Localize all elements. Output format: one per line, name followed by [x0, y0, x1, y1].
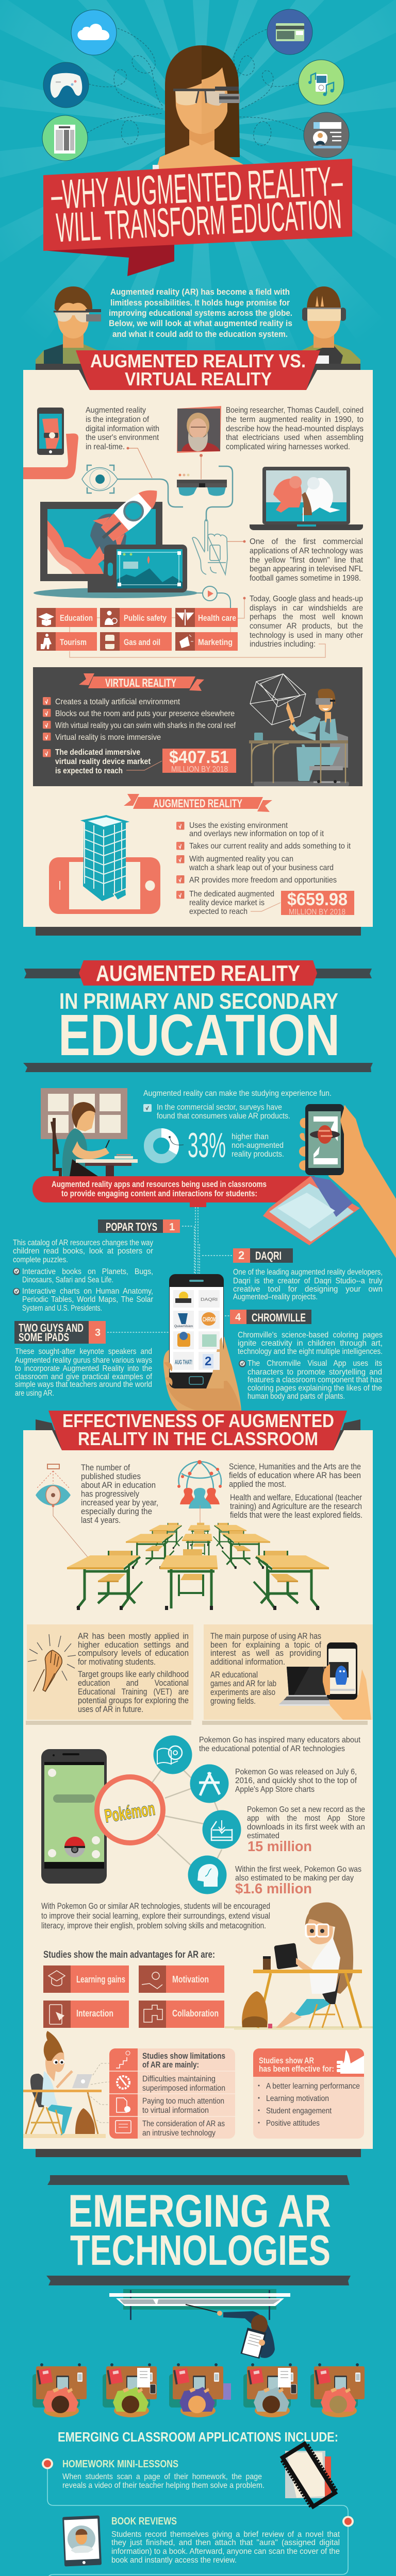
illustration: students at desks	[32, 2363, 365, 2417]
stat: 15 million downloads: app with the most App Store	[247, 1814, 365, 1823]
text: Two Guys: simple ways that teachers around the world	[15, 1380, 152, 1389]
text: AR definition: in real-time.	[86, 443, 125, 451]
text: fields of education: Health and welfare, Educational (teacher	[230, 1493, 362, 1502]
text: Chromville: ignite creativity in children through art,	[238, 1339, 383, 1348]
text: main purpose: interest as well as providing	[210, 1648, 321, 1658]
heading banner: effectiveness: REALITY IN THE CLASSROOM	[78, 1428, 318, 1449]
text: studying experience: found that consumers value AR products.	[157, 1112, 290, 1121]
text: Daqri: Augmented–reality projects.	[233, 1293, 318, 1301]
ribbon: augmented reality	[124, 794, 272, 812]
text: Google glass: displays in car windshields are	[250, 604, 363, 613]
callout: apps and resources: to provide engaging content and interactions for students:	[61, 1189, 257, 1198]
text: Daqri: Daqri is the creator of Daqri Studio--a truly	[233, 1277, 383, 1285]
text: higher education	[78, 1631, 189, 1714]
label: Daqri	[233, 1248, 293, 1263]
checklist: augmented reality: Takes our current reality and adds something to it	[189, 842, 351, 851]
table: effectiveness of AR: A better learning performance	[266, 2082, 360, 2091]
section heading: AR in primary and secondary education: IN PRIMARY AND SECONDARY	[59, 989, 338, 1014]
advantage tiles: Motivation	[172, 1974, 209, 1985]
table: effectiveness of AR: Student engagement	[266, 2107, 332, 2115]
stat: 15 million downloads: 15 million	[248, 1838, 312, 1854]
text: social learning: literacy, improve their english, problem solving skills and metacognition.	[41, 1921, 266, 1930]
label: Two Guys and Some iPads: SOME IPADS	[19, 1331, 69, 1344]
stat: AR market: MILLION BY 2018	[289, 908, 345, 917]
checklist: augmented reality: and overlays new information on top of it	[189, 829, 324, 838]
woman with smart glasses	[153, 45, 249, 180]
card: higher education	[26, 1624, 193, 1725]
application: homework mini-lessons: When students scan a page of their homework, the page	[62, 2472, 262, 2481]
text: main purpose: growing fields.	[210, 1696, 256, 1706]
stat: 33 percent donut	[148, 1126, 284, 1165]
text: number of studies: about AR in education	[81, 1480, 156, 1490]
stat: 1.6 million per day	[235, 1865, 361, 1896]
heading: emerging classroom applications: EMERGING CLASSROOM APPLICATIONS INCLUDE:	[58, 2429, 338, 2445]
text: Pokemon release: Apple's App Store charts	[235, 1785, 315, 1794]
text: Two Guys: to incorporate Augmented Reality into the	[15, 1364, 152, 1373]
section heading: emerging AR technologies	[46, 2175, 351, 2285]
text: number of studies: especially during the	[81, 1506, 152, 1516]
application: book reviews: they just finished, and then attach that "aura" (assigned digital	[111, 2538, 340, 2547]
play button connector	[191, 586, 230, 609]
text: Pokemon educators: the educational potential of AR technologies	[199, 1744, 345, 1753]
text: AR definition	[86, 406, 159, 451]
industry tiles: Gas and oil	[124, 637, 160, 647]
application: book reviews: BOOK REVIEWS	[111, 2516, 177, 2527]
connector lines	[118, 447, 233, 521]
callout: apps and resources	[32, 1176, 315, 1207]
text: Pokemon release: Pokemon Go was released on July 6,	[235, 1768, 357, 1776]
illustration: laptop, phone and hand	[279, 1642, 371, 1720]
app icons: DAQRI	[201, 1297, 218, 1302]
text: Popar Toys: Periodic Tables, World Maps, The Solar	[22, 1295, 153, 1304]
table: limitations of AR: superimposed information	[142, 2084, 225, 2093]
table: effectiveness of AR: has been effective for:	[259, 2064, 334, 2074]
woman with VR goggles	[296, 286, 360, 370]
text: social learning: With Pokemon Go or similar AR technologies, students will be encouraged	[41, 1901, 270, 1911]
label: Daqri: DAQRI	[255, 1249, 282, 1262]
text: main purpose: additional information.	[210, 1657, 285, 1667]
app icons: 2	[205, 1354, 211, 1368]
text: fields of education: applied the most.	[229, 1479, 286, 1489]
text: Boeing researcher: the term augmented reality in 1990, to	[226, 415, 364, 424]
industry tiles	[37, 608, 238, 651]
intro paragraph: Below, we will look at what augmented reality is	[109, 318, 292, 328]
stat: AR market	[251, 890, 354, 917]
dotted connector lines	[107, 1207, 233, 1332]
heading banner: AR vs VR: VIRTUAL REALITY	[125, 368, 272, 389]
checklist: virtual reality	[43, 697, 236, 775]
label: Daqri: 2	[238, 1249, 244, 1262]
text: Popar Toys: System and U.S. Presidents.	[22, 1304, 102, 1313]
stat: 15 million downloads: Pokemon Go set a new record as the	[247, 1805, 365, 1814]
illustration: monitor with rocket and tablet	[34, 476, 197, 598]
photo: Thomas Caudell	[177, 406, 221, 453]
application: book reviews: information) to a book. Afterward, anyone can scan the cover of the	[111, 2547, 340, 2556]
label: Popar Toys: 1	[169, 1222, 175, 1233]
text: first down line: began appearing in televised NFL	[250, 565, 363, 573]
text: higher education: Educational Training (VET) are	[78, 1687, 189, 1697]
label: Chromville: 4	[235, 1312, 241, 1323]
text: Google glass: perhaps the most well known	[250, 613, 363, 621]
table: limitations of AR: The consideration of AR as	[142, 2120, 225, 2128]
text: social learning: to improve their social learning, explore their surroundings, extend visual	[41, 1911, 270, 1921]
table: limitations of AR: of AR are mainly:	[142, 2060, 199, 2070]
Pokemon hub with connectors: Pokémon	[103, 1798, 156, 1826]
text: AR definition: digital information with	[86, 425, 159, 433]
text: Two Guys	[15, 1347, 153, 1398]
checklist: virtual reality: Virtual reality is more immersive	[55, 733, 161, 742]
table: limitations of AR	[109, 2048, 235, 2139]
table: limitations of AR: Paying too much attention	[142, 2097, 224, 2106]
icon: app store	[190, 1764, 229, 1803]
text: fields of education: fields of education where AR has been	[229, 1470, 361, 1480]
table: limitations of AR: Studies show limitations	[142, 2051, 225, 2061]
intro paragraph: improving educational systems across the globe.	[109, 308, 292, 318]
icon: tablet with avatar	[62, 2515, 102, 2566]
section heading: AR in primary and secondary education: AUGMENTED REALITY	[96, 961, 300, 986]
icon: download tray	[202, 1810, 241, 1849]
text: higher education: education and Vocational	[78, 1678, 189, 1688]
heading banner: effectiveness: EFFECTIVENESS OF AUGMENTED	[62, 1410, 334, 1431]
illustration: building popping out of phone	[49, 816, 160, 914]
man with smart glasses	[36, 286, 101, 370]
timeline path	[23, 2464, 349, 2576]
advantage tiles: Learning gains	[76, 1974, 125, 1985]
text: Google glass: Today, Google glass and heads-up	[250, 595, 363, 603]
advantage tiles: Interaction	[76, 2008, 113, 2019]
application: homework mini-lessons	[42, 2443, 337, 2507]
connector with dot	[227, 540, 245, 543]
table: limitations of AR: to virtual information	[142, 2106, 209, 2115]
section heading: AR in primary and secondary education	[23, 960, 373, 1072]
application: book reviews	[62, 2515, 354, 2566]
illustration: teacher at whiteboard	[109, 2289, 290, 2359]
text: Boeing researcher: describe how the head-mounted displays	[226, 425, 364, 433]
text: higher education: for motivating students.	[78, 1657, 156, 1667]
card: main purpose of AR	[202, 1624, 373, 1725]
advantage tiles	[43, 1965, 224, 2028]
stat: AR market: $659.98	[287, 890, 348, 909]
table: limitations of AR: Difficulties maintaining	[142, 2075, 216, 2083]
application: book reviews: book and instantly access the review.	[111, 2556, 237, 2565]
icon: game controller	[43, 62, 89, 108]
text: Two Guys: classroom and give practical examples of	[15, 1372, 153, 1381]
text: Boeing researcher: complicated wiring harnesses worked.	[226, 443, 350, 451]
illustration: hand holding phone with AR apps	[163, 1274, 241, 1411]
text: main purpose: been for explaining a topic of	[210, 1640, 321, 1650]
stat: VR market: $407.51	[169, 748, 229, 767]
section heading: AR in primary and secondary education: EDUCATION	[58, 1003, 340, 1067]
text: number of studies: last 4 years.	[81, 1515, 121, 1525]
app icons: CHROM	[203, 1316, 216, 1323]
application: homework mini-lessons: HOMEWORK MINI-LESSONS	[62, 2459, 178, 2470]
text: Two Guys: are using AR.	[15, 1389, 54, 1398]
icon: eye scan	[82, 465, 118, 493]
text: Chromville: coloring pages explaining the likes of the	[248, 1384, 382, 1393]
illustration: worried boy at laptop	[23, 2031, 109, 2138]
heading banner: AR vs VR: AUGMENTED REALITY VS.	[90, 350, 306, 371]
illustration: student at window	[41, 1088, 138, 1176]
checklist: augmented reality: reality device market is	[189, 899, 265, 907]
text: Pokemon educators: Pokemon Go has inspired many educators about	[199, 1736, 360, 1744]
table: effectiveness of AR: Learning motivation	[266, 2094, 329, 2103]
text: Boeing researcher: Boeing researcher, Thomas Caudell, coined	[226, 406, 364, 415]
icon: phone with hand	[23, 408, 78, 479]
text: higher education: AR has been mostly applied in	[78, 1631, 189, 1641]
text: Chromville: The Chromville Visual App uses its	[248, 1359, 382, 1368]
icon: cloud	[71, 10, 117, 55]
icon: globe and people	[177, 1460, 222, 1525]
table: effectiveness of AR: Positive attitudes	[266, 2119, 320, 2128]
text: Google glass: industries including:	[250, 640, 316, 649]
label: Two Guys and Some iPads: TWO GUYS AND	[19, 1321, 84, 1334]
text: studying experience: In the commercial sector, surveys have	[157, 1103, 282, 1112]
text: Boeing researcher: that electricians used when assembling	[226, 433, 364, 442]
stat: 33 percent donut: reality products.	[232, 1150, 284, 1159]
icon: film on book	[281, 2443, 337, 2507]
text: Popar Toys	[13, 1239, 153, 1313]
text: Daqri	[233, 1268, 383, 1301]
stat: 1.6 million per day: Within the first week, Pokemon Go was	[235, 1865, 361, 1874]
app icons: AUG THAT!	[175, 1359, 192, 1366]
panel: effectiveness of AR in the classroom	[23, 1410, 373, 2157]
text: AR definition: the user's environment	[86, 433, 159, 442]
checklist: augmented reality: With augmented reality you can	[189, 855, 293, 863]
text: main purpose: experiments are also	[210, 1687, 275, 1697]
industry tiles: Marketing	[198, 637, 233, 647]
industry tiles: Health care	[198, 613, 236, 623]
intro paragraph: and what it could add to the education system.	[112, 329, 288, 339]
text: studying experience	[143, 1089, 332, 1121]
table: effectiveness of AR	[253, 2048, 364, 2139]
text: number of studies	[81, 1463, 158, 1525]
stat: 33 percent donut: higher than	[232, 1132, 269, 1141]
stat: VR market	[126, 748, 236, 774]
header illustration	[0, 0, 396, 448]
text: number of studies: increased year by year,	[81, 1498, 158, 1507]
checklist: virtual reality: The dedicated immersive	[55, 748, 140, 757]
text: Pokemon release	[235, 1768, 357, 1794]
stat: 15 million downloads: downloads in its first week with an	[247, 1823, 365, 1832]
icon: AR glove	[192, 519, 227, 574]
stat: VR market: MILLION BY 2018	[171, 765, 228, 774]
text: number of studies: The number of	[81, 1463, 130, 1472]
text: Popar Toys: children read books, look at posters or	[13, 1247, 153, 1256]
text: Chromville: Chromville's science-based coloring pages	[238, 1331, 383, 1340]
stat: 33 percent donut: non-augmented	[232, 1141, 284, 1150]
label: Chromville	[230, 1310, 311, 1324]
industry tiles: Tourism	[60, 637, 87, 647]
icon: book and disc	[154, 1735, 192, 1774]
heading banner: effectiveness	[48, 1410, 347, 1450]
stat: 1.6 million per day: $1.6 million	[235, 1880, 312, 1896]
application: homework mini-lessons: reveals a video of their teacher helping them solve a problem.	[62, 2481, 265, 2490]
text: Chromville	[238, 1331, 383, 1401]
text: Two Guys: These sought-after keynote speakers and	[15, 1347, 152, 1356]
text: AR definition: Augmented reality	[86, 406, 146, 415]
illustration: man in VR headset	[249, 674, 349, 786]
text: Pokemon educators	[199, 1736, 360, 1753]
text: fields of education: Science, Humanities and the Arts are the	[229, 1462, 361, 1471]
panel base shadow	[36, 922, 361, 936]
illustration: hand with phone over book	[263, 1104, 396, 1258]
checklist: virtual reality: With virtual reality you can swim with sharks in the coral reef	[55, 721, 236, 730]
panel: augmented vs virtual reality	[23, 350, 373, 936]
app icons	[173, 1290, 220, 1370]
checklist: virtual reality: virtual reality device market	[55, 757, 151, 766]
icon: newspaper	[42, 115, 88, 161]
checklist: augmented reality: The dedicated augmented	[189, 890, 274, 899]
text: Popar Toys: This catalog of AR resources changes the way	[13, 1239, 153, 1247]
stat: 1.6 million per day: also estimated to be making per day	[235, 1874, 354, 1883]
intro paragraph: limitless possibilities. It holds huge promise for	[110, 298, 290, 308]
text: fields of education: fields that were the least explored fields.	[230, 1510, 362, 1520]
icon: music player	[299, 60, 344, 105]
dashed connector lines	[87, 28, 304, 146]
Pokemon hub with connectors	[97, 1765, 222, 1868]
text: main purpose: The main purpose of using AR has	[210, 1631, 321, 1641]
ribbon: augmented reality: AUGMENTED REALITY	[153, 797, 242, 810]
text: Chromville: human body and parts of plants.	[248, 1392, 345, 1401]
text: Google glass	[250, 595, 364, 649]
industry tiles: Education	[60, 613, 93, 623]
table: limitations of AR: an intrusive technology	[142, 2129, 216, 2138]
icon: laptop with football players	[250, 467, 363, 530]
icon: credit card	[267, 9, 312, 55]
checklist: augmented reality: expected to reach	[189, 907, 248, 916]
application: book reviews: Students record themselves giving a brief review of a novel that	[111, 2530, 340, 2539]
text: first down line: applications of AR technology was	[250, 547, 363, 555]
checklist: augmented reality: Uses the existing environment	[189, 821, 288, 830]
title banner	[43, 158, 352, 276]
text: studying experience: Augmented reality can make the studying experience fun.	[143, 1089, 332, 1098]
text: Two Guys: Augmented reality gurus share various ways	[15, 1356, 152, 1365]
icon: eye projector	[36, 1464, 90, 1560]
icon: smart glasses	[177, 474, 227, 496]
heading: main advantages: Studies show the main advantages for AR are:	[43, 1950, 215, 1960]
text: fields of education	[229, 1462, 362, 1520]
ribbon: virtual reality	[79, 673, 204, 691]
text: higher education: Target groups like early childhood	[78, 1669, 189, 1679]
connector lines for industries	[70, 597, 325, 657]
stat: 33 percent donut: 33%	[188, 1126, 226, 1165]
banner fold	[43, 242, 174, 276]
text: first down line: football games sometime in 1998.	[250, 574, 361, 583]
illustration: girl with tablet	[225, 1902, 373, 2030]
advantage tiles: Collaboration	[172, 2008, 219, 2019]
table: effectiveness of AR: Studies show AR	[259, 2056, 314, 2065]
icon: profile card	[304, 112, 349, 158]
illustration: classroom desks	[67, 1523, 329, 1610]
text: Popar Toys: Interactive books on Planets, Bugs,	[22, 1267, 153, 1276]
text: main purpose: games and AR for lab	[210, 1679, 276, 1688]
intro paragraph	[109, 287, 292, 339]
checklist: augmented reality: watch a shark leap out of your business card	[189, 863, 334, 872]
panel: virtual reality	[33, 667, 362, 786]
text: Chromville: features a classroom component that has	[248, 1376, 382, 1384]
text: Pokemon release: 2016, and quickly shot to the top of	[235, 1776, 357, 1785]
text: Chromville: characters to promote storytelling and	[248, 1368, 382, 1377]
illustration: Pokemon phone	[41, 1749, 107, 1884]
intro paragraph: Augmented reality (AR) has become a field with	[110, 287, 290, 297]
text: Google glass: consumer AR products, but the	[250, 622, 363, 631]
text: main purpose	[210, 1631, 321, 1706]
text: fields of education: training) and Agriculture are the research	[230, 1501, 362, 1511]
checklist: virtual reality: Creates a totally artificial environment	[55, 698, 180, 706]
sunburst rays	[0, 0, 396, 448]
label: Two Guys and Some iPads	[14, 1321, 106, 1344]
text: Popar Toys: Dinosaurs, Safari and Sea Life.	[22, 1276, 113, 1284]
text: number of studies: has progressively	[81, 1489, 139, 1499]
label: Popar Toys: POPAR TOYS	[106, 1221, 157, 1233]
icon: raised fist	[28, 1634, 76, 1691]
text: higher education: uses of AR in future.	[78, 1704, 143, 1714]
checklist: augmented reality	[176, 821, 351, 916]
checklist: virtual reality: is expected to reach	[55, 767, 123, 775]
section heading: emerging AR technologies: EMERGING AR	[68, 2185, 331, 2236]
text: first down line: the yellow "first down" line that	[250, 556, 364, 565]
stat: 15 million downloads	[247, 1805, 365, 1854]
text: first down line: One of the first commercial	[250, 537, 363, 546]
text: Popar Toys: Interactive charts on Human Anatomy,	[22, 1287, 153, 1296]
text: higher education: potential groups for exploring the	[78, 1696, 189, 1705]
heading banner: AR vs VR	[76, 350, 320, 390]
checklist: virtual reality: Blocks out the room and puts your presence elsewhere	[55, 709, 235, 718]
text: AR definition: is the integration of	[86, 415, 149, 424]
label: Two Guys and Some iPads: 3	[95, 1327, 101, 1338]
panel base shadow	[36, 2143, 361, 2157]
text: Daqri: creative tool for designing your own	[233, 1285, 383, 1294]
ribbon: virtual reality: VIRTUAL REALITY	[105, 676, 176, 689]
icon: head with strategy	[188, 1856, 227, 1894]
stat: 15 million downloads: estimated	[247, 1832, 279, 1840]
text: social learning	[41, 1901, 270, 1930]
text: higher education: compulsory levels of education	[78, 1648, 189, 1658]
label: Chromville: CHROMVILLE	[252, 1311, 306, 1324]
text: higher education: higher education settings and	[78, 1640, 189, 1650]
text: Google glass: technology is used in many other	[250, 631, 364, 640]
text: main purpose: AR educational	[210, 1670, 258, 1680]
text: Boeing researcher	[226, 406, 364, 451]
app icons: QuiverVision	[174, 1325, 193, 1328]
checklist: augmented reality: AR provides more freedom and opportunities	[189, 876, 337, 885]
text: first down line	[250, 537, 364, 583]
text: Popar Toys: complete puzzles.	[13, 1256, 68, 1264]
industry tiles: Public safety	[124, 613, 167, 623]
text: number of studies: published studies	[81, 1471, 141, 1481]
callout: apps and resources: Augmented reality apps and resources being used in classrooms	[52, 1179, 267, 1189]
